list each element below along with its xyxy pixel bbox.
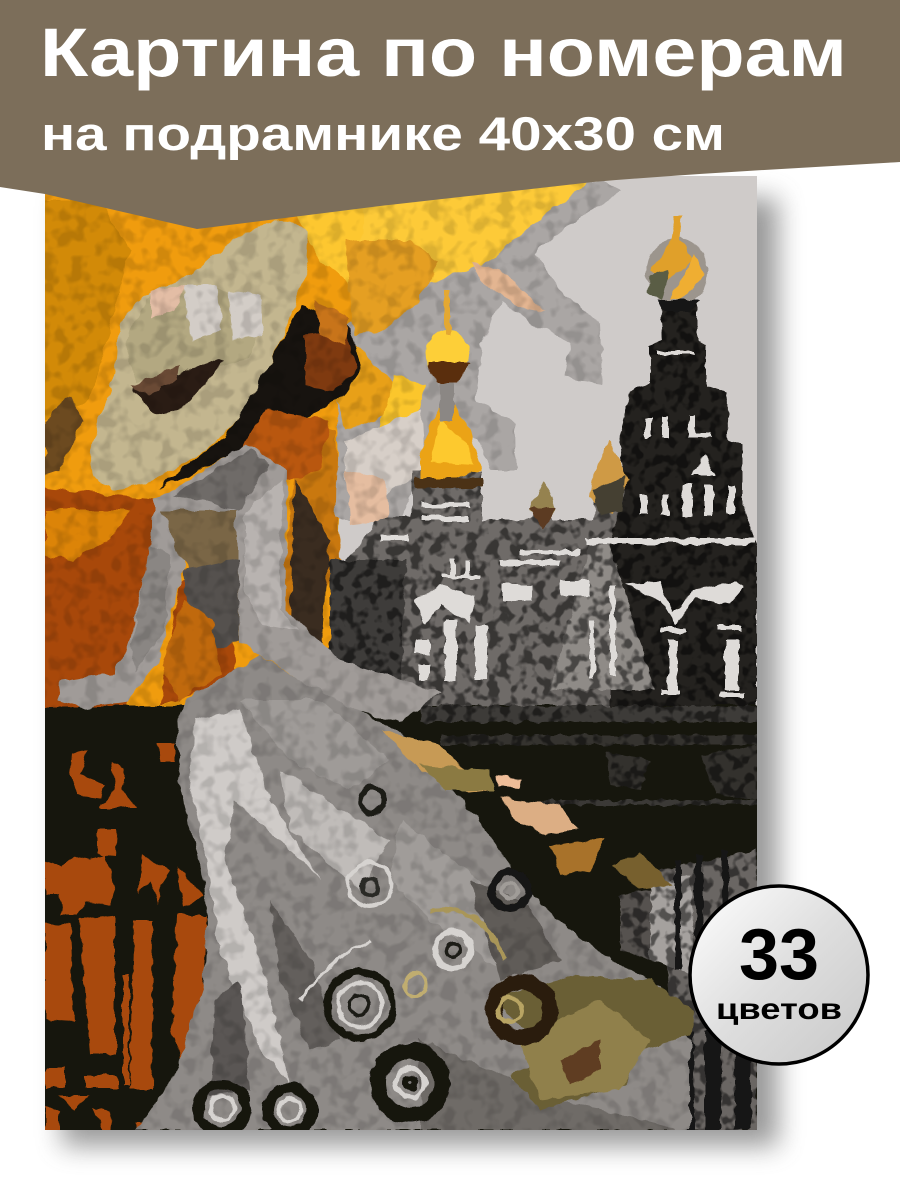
painting xyxy=(30,170,770,1136)
canvas shadow xyxy=(62,198,778,1146)
balcony railing: black base xyxy=(30,706,770,1136)
cathedral: golden domes xyxy=(414,290,628,530)
woman: torso and arms xyxy=(58,445,440,722)
woman: dress xyxy=(137,655,690,1130)
cathedral: tower onion dome xyxy=(646,215,708,312)
hat xyxy=(91,220,310,489)
badge: 33 colours: цветов xyxy=(716,993,842,1026)
painting background: orange and gold left side xyxy=(45,194,364,708)
title: Картина по номерам xyxy=(40,14,847,91)
railing: right side grey highlights and columns xyxy=(420,706,770,1130)
woman: hair and neck shadow xyxy=(158,300,362,488)
dress: gold and pink leaves xyxy=(382,730,695,1110)
painting sky: pale grey xyxy=(338,176,757,706)
badge: 33 colours xyxy=(690,886,868,1064)
cathedral: white window details xyxy=(380,351,755,697)
subtitle: на подрамнике 40х30 см xyxy=(41,107,725,160)
painting sky: grey and yellow clouds xyxy=(335,178,620,525)
cathedral: building silhouette xyxy=(330,300,757,720)
dress: rose swirls xyxy=(198,788,550,1132)
badge: 33 colours: 33 xyxy=(739,915,819,995)
railing: right column stripes xyxy=(675,850,751,1130)
railing: left orange ironwork gaps xyxy=(45,743,207,1130)
top banner xyxy=(0,0,900,229)
